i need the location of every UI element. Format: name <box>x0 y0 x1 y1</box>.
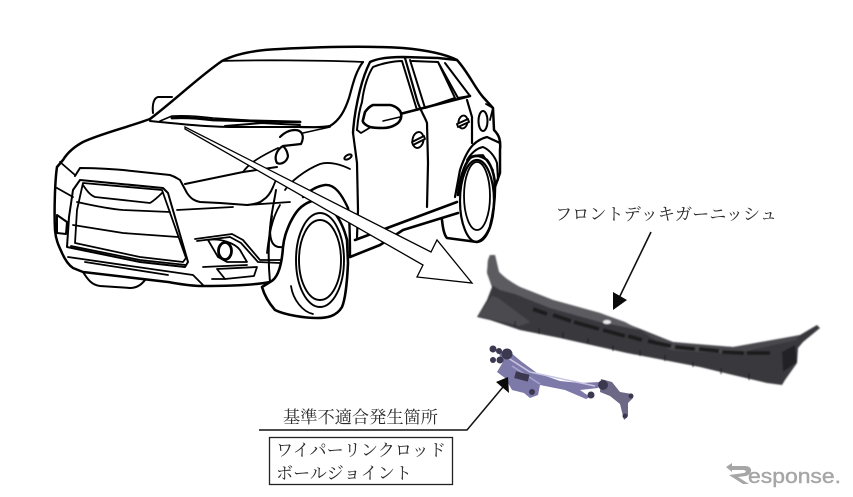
defect location label: 基準不適合発生箇所 <box>283 408 438 427</box>
callout box: wiper link rod ball joint: ワイパーリンクロッド <box>276 441 446 460</box>
callout box: wiper link rod ball joint: ボールジョイント <box>276 464 412 483</box>
callout box: wiper link rod ball joint <box>270 438 452 484</box>
Response watermark logo <box>726 463 841 488</box>
garnish label: フロントデッキガーニッシュ <box>555 205 777 224</box>
front wheel <box>262 201 348 318</box>
leader arrow to wiper linkage <box>259 377 509 430</box>
wheel arch curves <box>269 153 352 282</box>
rear wheel and arch <box>442 137 500 242</box>
leader arrow to garnish <box>613 232 651 310</box>
Response watermark logo: esponse. <box>748 466 841 488</box>
white arrow from windshield to parts <box>185 127 472 283</box>
left door mirror <box>153 97 172 113</box>
front door and body side <box>350 57 493 257</box>
windshield wipers <box>160 116 300 126</box>
garnish clip hole <box>603 320 611 324</box>
mirror trim <box>383 117 400 121</box>
front deck garnish part <box>477 255 820 385</box>
garnish lower ticks <box>515 321 749 380</box>
car body outline <box>55 47 500 288</box>
near door mirror on hood side <box>276 127 330 164</box>
wiper linkage part <box>490 346 634 420</box>
garnish vent slots <box>533 309 770 353</box>
side mirror <box>363 105 401 128</box>
car line drawing <box>55 47 500 318</box>
front fascia and grille <box>57 148 290 285</box>
door handles <box>411 115 469 149</box>
